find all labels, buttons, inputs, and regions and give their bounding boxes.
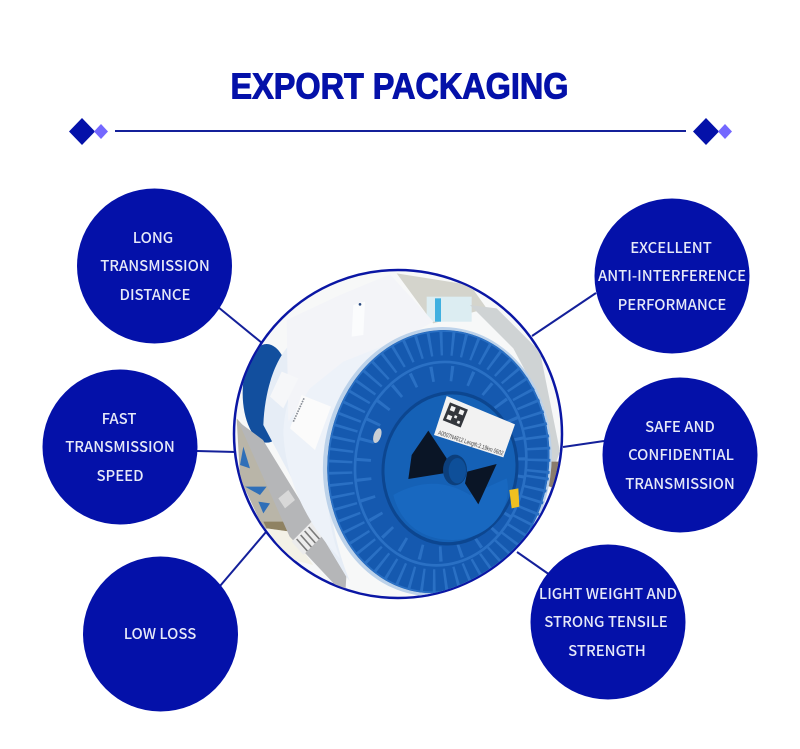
title divider with diamonds <box>69 118 732 145</box>
central reel photo <box>234 270 569 611</box>
circle: light weight and strong tensile strength: STRENGTH <box>568 640 646 661</box>
second reel behind <box>242 344 282 443</box>
circle: low loss <box>83 556 238 712</box>
small pill <box>373 428 382 443</box>
body of the reel <box>263 348 350 580</box>
circle: long transmission distance: TRANSMISSION <box>100 255 210 276</box>
circle: excellent anti-interference performance: ANTI-INTERFERENCE <box>598 265 746 286</box>
circle: light weight and strong tensile strength: LIGHT WEIGHT AND <box>539 583 677 604</box>
circle: fast transmission speed: SPEED <box>97 465 143 486</box>
circle: excellent anti-interference performance: PERFORMANCE <box>618 294 726 315</box>
connector lines <box>197 293 604 586</box>
circle: safe and confidential transmission <box>602 378 758 532</box>
body labels <box>290 395 331 450</box>
hub windows <box>408 431 447 479</box>
circle: safe and confidential transmission: SAFE AND <box>645 416 715 437</box>
circle: long transmission distance: LONG <box>133 227 173 248</box>
circle: light weight and strong tensile strength: STRONG TENSILE <box>544 611 668 632</box>
flange spokes <box>327 330 550 594</box>
title: EXPORT PACKAGING <box>230 66 568 106</box>
background shelving <box>397 273 487 323</box>
reel label <box>434 396 515 457</box>
yellow tag <box>509 488 519 508</box>
reel label: A0007N4812 Length:2.19km 0602 <box>437 430 505 457</box>
circle: safe and confidential transmission: CONFIDENTIAL <box>628 444 734 465</box>
barcode strip <box>238 422 346 598</box>
circle: excellent anti-interference performance: EXCELLENT <box>630 237 712 258</box>
plastic wrap <box>287 314 433 402</box>
circle: excellent anti-interference performance <box>594 198 750 354</box>
flange rim <box>322 327 552 596</box>
hub <box>382 391 518 546</box>
machinery on the left <box>237 418 287 532</box>
flange <box>327 330 550 594</box>
spindle hole <box>443 455 467 485</box>
circle: safe and confidential transmission: TRANSMISSION <box>625 473 735 494</box>
circle: fast transmission speed: TRANSMISSION <box>65 436 175 457</box>
circle: long transmission distance: DISTANCE <box>120 284 191 305</box>
circle: light weight and strong tensile strength <box>530 544 686 700</box>
circle: fast transmission speed: FAST <box>102 408 136 429</box>
circle: low loss: LOW LOSS <box>124 623 196 644</box>
circle: fast transmission speed <box>42 370 198 524</box>
circle: long transmission distance <box>77 188 232 344</box>
